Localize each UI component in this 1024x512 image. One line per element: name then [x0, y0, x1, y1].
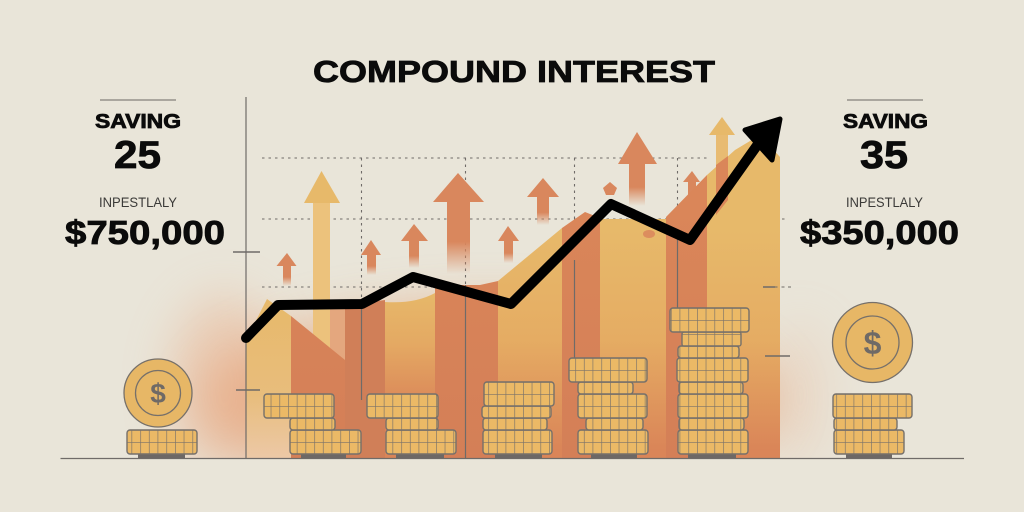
arrow 4 — [401, 224, 428, 268]
arrow 1 — [276, 253, 296, 286]
arrow 2 yellow — [304, 171, 340, 353]
left summary: $750,000 — [65, 214, 225, 251]
right summary: $350,000 — [800, 214, 959, 251]
arrow 6 — [498, 226, 519, 263]
right summary — [800, 100, 959, 251]
yellow wide column — [600, 219, 666, 458]
left summary: 25 — [114, 134, 161, 177]
marker diamond — [603, 182, 617, 195]
growth line with arrow — [246, 119, 780, 338]
orange blob — [643, 230, 655, 238]
arrow 8 — [618, 132, 657, 206]
title: COMPOUND INTEREST — [313, 54, 715, 89]
yellow rising column — [498, 228, 562, 458]
orange column — [666, 175, 707, 458]
area chart — [246, 135, 780, 458]
coin stack 1 — [264, 394, 361, 458]
left coin — [124, 359, 192, 427]
left summary — [65, 100, 225, 251]
arrow 9 — [683, 171, 700, 204]
orange column — [345, 300, 385, 458]
coin stack 5 — [670, 308, 749, 458]
arrow 5 — [433, 173, 484, 274]
coin stack 4 — [569, 358, 648, 458]
right summary: 35 — [860, 134, 908, 177]
coin stack 2 — [367, 394, 456, 458]
orange column — [435, 281, 498, 458]
orange strip — [716, 156, 728, 215]
orange column — [562, 212, 600, 458]
arrow 3 — [361, 240, 381, 275]
left coin stack — [127, 430, 197, 458]
right summary: SAVING — [843, 111, 928, 133]
arrow 10 yellow — [709, 117, 735, 185]
axes and ticks — [60, 97, 964, 458]
right coin: $ — [864, 325, 882, 361]
yellow area left — [246, 299, 291, 458]
pale orange strip — [330, 308, 345, 364]
left coin: $ — [150, 378, 166, 409]
left summary: INPESTLALY — [99, 195, 177, 210]
coin stack 3 — [482, 382, 554, 458]
orange wedge — [291, 316, 345, 458]
arrow 7 — [527, 178, 559, 225]
yellow tall column — [707, 135, 780, 458]
left summary: SAVING — [95, 111, 181, 133]
infographic canvas — [60, 60, 964, 460]
dashed grid — [262, 158, 792, 300]
right summary: INPESTLALY — [846, 195, 923, 210]
yellow arc column — [385, 293, 435, 458]
right coin stack — [833, 394, 912, 458]
peach glow behind chart — [170, 295, 828, 495]
background arrows — [276, 117, 735, 353]
right coin — [832, 302, 912, 382]
